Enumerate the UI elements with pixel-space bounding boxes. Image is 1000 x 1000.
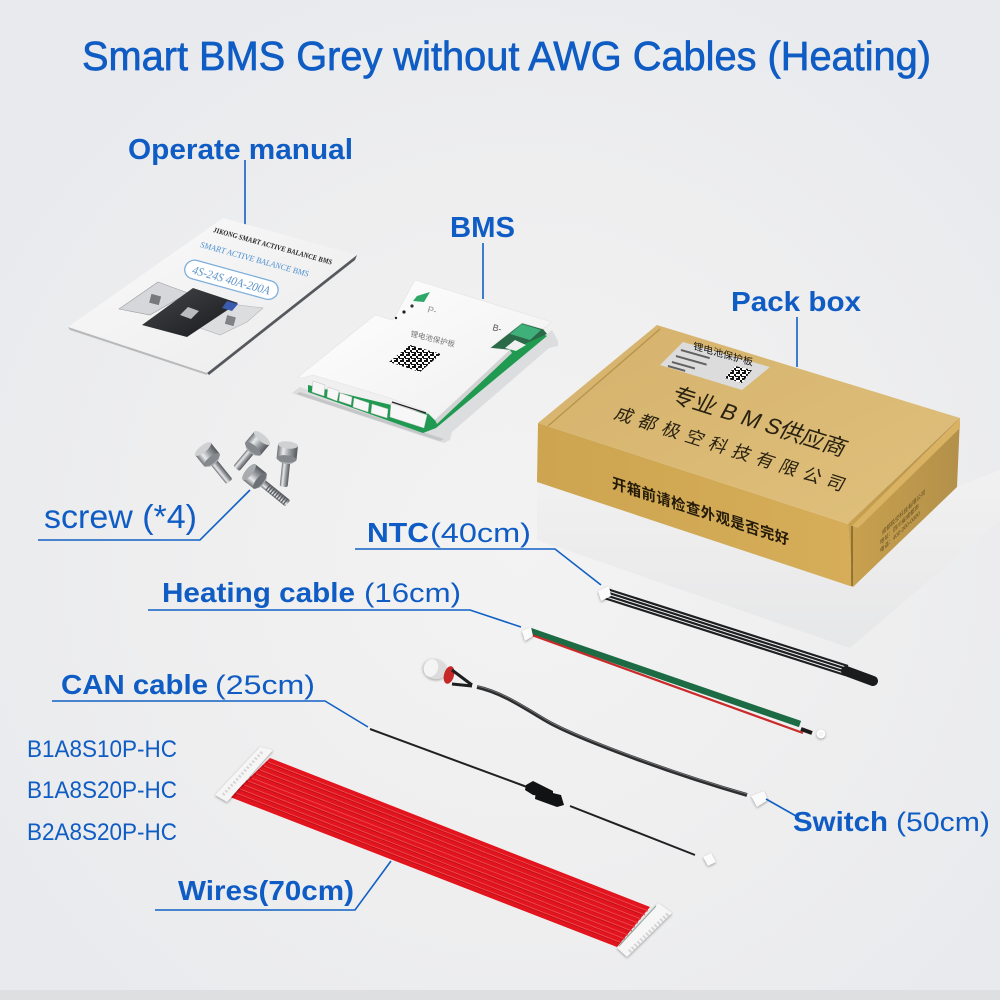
leader line: BMS [482, 243, 484, 299]
panel: switch cable [420, 655, 990, 837]
red wire [529, 634, 803, 733]
box right face [848, 418, 960, 587]
manual product: black device [142, 288, 238, 337]
leader line: CAN [52, 701, 368, 727]
label: switch: Switch [793, 806, 888, 837]
screw 4 [240, 462, 294, 511]
screw 1 [193, 440, 237, 488]
panel: pack box [537, 286, 1000, 648]
panel: NTC cable [355, 517, 873, 681]
NTC probe [846, 671, 873, 681]
screw 2 [229, 429, 272, 475]
heating connector [522, 627, 533, 641]
QR code [389, 345, 441, 372]
CAN cable [370, 729, 695, 855]
heading: pack box: Pack box [731, 286, 861, 317]
label: CAN cable: (25cm) [215, 670, 315, 700]
box label: 锂电池保护板 [693, 340, 754, 369]
box label [660, 340, 770, 390]
label: NTC: (40cm) [430, 518, 531, 548]
label: CAN cable: CAN cable [61, 669, 208, 700]
box top text line 1: 专业 B M S供应商 [667, 383, 852, 461]
box front face [537, 423, 853, 587]
right connector [617, 903, 672, 957]
CAN end connector [703, 853, 716, 866]
box side text: 成都极空科技有限公司 [882, 488, 925, 537]
heating tip [801, 729, 812, 733]
terminal: P-: P- [426, 304, 438, 316]
box side text: 电话：400-000-0000 [880, 508, 920, 555]
leader line: pack box [796, 317, 798, 367]
label: NTC: NTC [367, 517, 429, 548]
panel: heating cable [148, 577, 824, 737]
left connector [215, 747, 273, 802]
manual booklet [68, 218, 357, 375]
terminal: B-: B- [491, 322, 503, 334]
title: Smart BMS Grey without AWG Cables (Heating) [82, 33, 931, 79]
manual pill badge: 4S-24S 40A-200A [191, 263, 273, 298]
white cover [298, 280, 552, 420]
box front text: 开箱前请检查外观是否完好 [612, 474, 789, 549]
switch connector [751, 791, 768, 807]
part numbers: B2A8S20P-HC [27, 819, 177, 846]
box top text line 2: 成都极空科技有限公司 [611, 404, 849, 495]
switch cable [477, 687, 747, 795]
front connectors [312, 381, 427, 428]
manual blue subheading: SMART ACTIVE BALANCE BMS [200, 240, 310, 279]
box side text [880, 488, 925, 555]
label: heating cable: Heating cable [162, 577, 355, 608]
leader line: NTC [355, 549, 601, 585]
box side text: 地址：四川省成都市 [880, 502, 919, 547]
inline connector [525, 781, 564, 807]
heading: operate manual: Operate manual [128, 134, 353, 166]
balance port [490, 323, 547, 350]
screw 3 [274, 440, 298, 488]
leader line: screw [38, 490, 250, 540]
box floor reflection [537, 470, 1000, 648]
NTC wires [604, 589, 848, 675]
manual product: right device [200, 303, 263, 335]
part numbers: B1A8S10P-HC [27, 736, 177, 763]
switch button [420, 655, 472, 686]
green wire [530, 631, 800, 724]
label: switch: (50cm) [896, 807, 990, 837]
leader line: manual [244, 160, 246, 228]
base plate [292, 330, 558, 443]
ring terminal [818, 731, 824, 737]
cardboard box [537, 325, 960, 587]
NTC connector [598, 586, 611, 601]
ribbon of red wires [230, 758, 650, 947]
leader line: heating [148, 610, 521, 627]
green pcb [308, 323, 547, 433]
part numbers [27, 736, 177, 846]
manual product: left device [119, 282, 188, 315]
panel: red wires [155, 747, 672, 957]
part numbers: B1A8S20P-HC [27, 777, 177, 804]
panel: CAN cable [52, 669, 716, 866]
panel: screws [38, 429, 298, 540]
panel: operate manual [68, 134, 357, 375]
label: wires: Wires(70cm) [178, 875, 354, 906]
leader line: wires [155, 861, 391, 910]
BMS board [292, 280, 558, 443]
green socket [413, 292, 430, 302]
leader line: switch [766, 799, 796, 816]
box top face [538, 325, 960, 524]
heading: BMS: BMS [450, 212, 515, 244]
manual black header text: JIKONG SMART ACTIVE BALANCE BMS [212, 225, 333, 267]
label: screw: screw (*4) [44, 498, 197, 535]
panel: BMS [292, 212, 558, 443]
label: heating cable: (16cm) [364, 578, 461, 608]
cover text: 锂电池保护板 [410, 328, 457, 349]
